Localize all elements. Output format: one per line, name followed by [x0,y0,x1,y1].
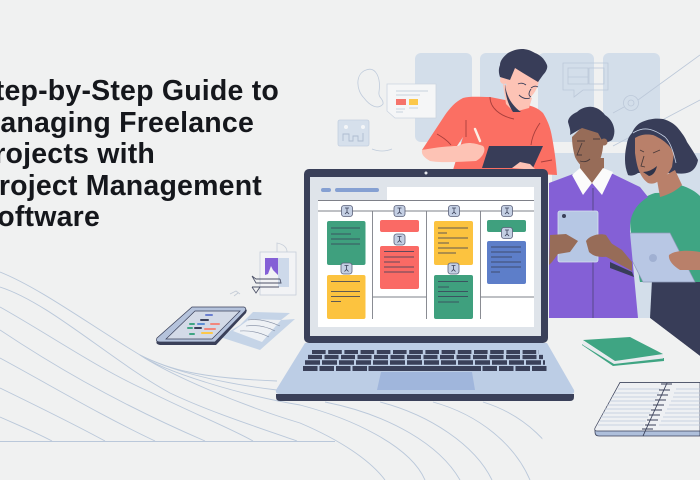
table top [540,318,700,480]
sketch: speech bubble [563,63,608,97]
sketch: circuit icon [338,120,369,146]
neck [657,170,682,197]
background panels [415,53,700,328]
forearm and hand [422,143,484,162]
person: man in purple shirt [549,107,648,318]
top bar [387,187,534,200]
document and plane icon [230,243,296,296]
title [0,75,279,233]
coral sweater [422,97,557,175]
face [635,134,674,184]
light tablet [618,233,695,282]
arm sleeve shadow [610,262,634,277]
hair [625,119,698,176]
task dashes [188,315,219,334]
sweater fold lines [437,97,552,162]
facial features [518,83,538,99]
paper sheets [220,312,295,350]
stylus [475,129,480,141]
avatar glyphs [344,208,509,272]
green book [582,337,664,366]
tablet logo [649,254,657,262]
laptop front lip [276,394,574,401]
neck [503,84,532,112]
small tablet [156,307,247,345]
person: man in coral sweater [422,49,557,175]
dark trousers [650,280,700,356]
keyboard [303,352,547,368]
sketch: network node lines [613,55,700,146]
header pills [321,188,379,192]
background wave lines [0,272,568,480]
spiral notebook [595,382,700,436]
eye and nose marks [640,150,660,167]
hair [499,49,547,82]
person: woman in green [618,119,700,356]
ear [600,138,608,146]
ruled lines [598,389,700,425]
sketch: outline blob [358,69,383,107]
green sweater [630,185,700,282]
hand [669,251,700,270]
purple shirt [549,174,648,318]
webcam [424,172,428,174]
face [505,66,539,102]
white collar [572,168,613,195]
left hand [549,234,578,265]
sketch: small curve [372,149,392,151]
avatar badges [341,206,512,274]
screen [310,177,541,336]
beard line [505,84,521,112]
laptop base [276,343,574,394]
right hand [512,162,536,170]
shirt placket [592,188,594,318]
sketch: note card [387,84,436,118]
board [318,200,534,327]
cards [327,220,526,319]
spiral [642,383,672,436]
neck [580,158,604,184]
hair [568,107,614,142]
right hand [586,234,612,257]
dark tablet [482,146,543,168]
screen bezel [304,169,548,343]
facial features [577,139,600,162]
card text lines [331,228,521,302]
face [572,127,603,170]
forearm [603,240,632,271]
tablet camera [562,214,566,218]
ear [500,76,508,84]
mouth [643,166,657,176]
hair strand [633,129,676,163]
board grid lines [318,200,534,319]
laptop [276,169,574,401]
light tablet [558,211,598,262]
trackpad [377,372,475,390]
